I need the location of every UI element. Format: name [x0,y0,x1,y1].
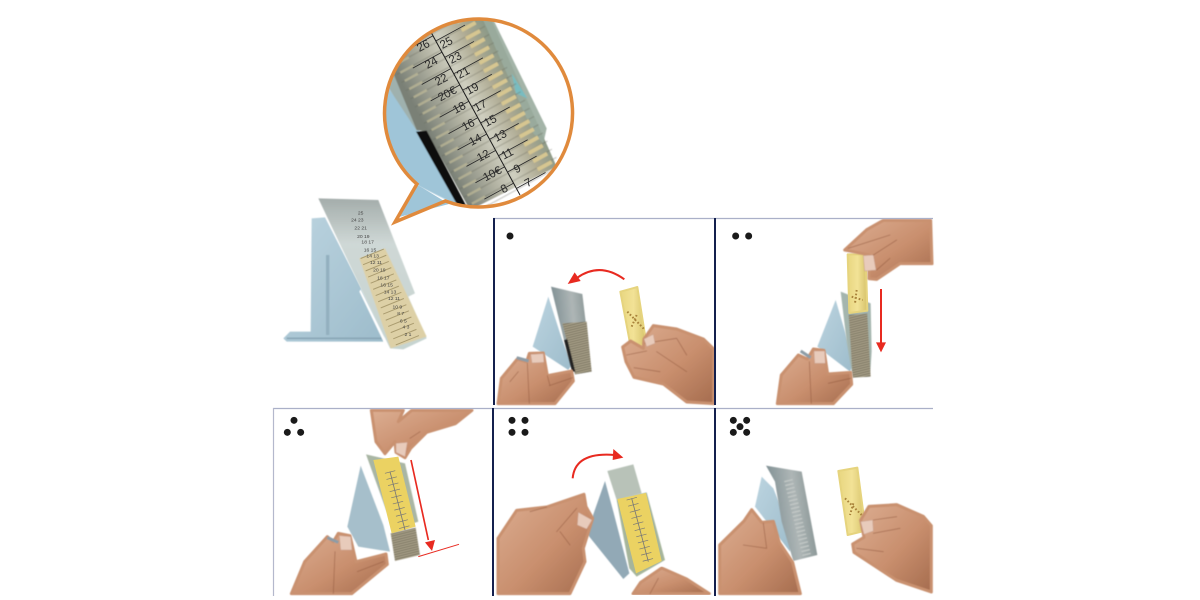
scale numbers: 14 [467,132,485,149]
top hand [371,410,472,458]
tube scale numbers: 16 15 [364,248,376,254]
magnified tube contents [386,20,557,206]
panel: step five [720,417,931,594]
tube scale numbers: 20 19 [373,268,386,274]
tube and coins [366,454,420,561]
stand [533,297,572,370]
tube scale numbers [351,210,412,338]
scale numbers: 11 [499,146,516,162]
tube scale numbers: 18 17 [377,275,390,281]
arrow curved left [568,270,624,284]
scale numbers: 23 [447,50,464,67]
tube scale numbers: 12 11 [370,260,382,266]
panel: step one [498,232,714,404]
scale numbers: 18 [451,100,468,117]
left hand [720,510,800,594]
panel: step four [498,417,709,594]
empty tube [766,466,817,561]
step marker five dots [730,417,750,436]
panel: step two [732,220,932,404]
stand [587,481,629,579]
left hand [498,494,593,594]
tube scale numbers: 6 5 [400,319,407,325]
tube scale numbers: 20 19 [357,234,370,240]
scale numbers: 12 [475,148,492,165]
callout outline [385,19,573,222]
scale numbers: 17 [472,98,489,115]
coin roll with scale [617,493,662,573]
stand [755,477,793,552]
tube scale numbers: 10 9 [392,305,402,311]
scale numbers: 10€ [481,164,504,184]
tube scale numbers: 16 15 [380,283,393,289]
left hand [498,353,573,404]
scale numbers: 13 [492,128,509,145]
left hand [777,349,852,404]
tube scale numbers: 24 23 [351,217,364,223]
device: tube on stand with coins [283,198,427,349]
scale numbers: 26 [415,38,432,55]
top hand [845,220,932,279]
arrow curved right [573,449,623,478]
scale numbers: 20€ [436,84,459,104]
arrow and baseline [411,460,459,557]
scale lines [417,26,535,203]
tube body [318,198,427,349]
stand [283,217,385,342]
tube with coins [841,292,872,378]
callout: magnified coin scale [377,8,573,222]
bottom hand [633,568,709,594]
scale numbers: 21 [455,65,472,82]
scale numbers: 7 [523,177,534,190]
panel: step three [284,410,472,594]
coin roll with scale [373,457,416,533]
scale numbers [415,35,534,196]
stand [817,300,853,372]
coin roll [848,254,867,313]
tube scale numbers: 25 [358,210,364,216]
scale numbers: 22 [433,72,450,89]
tube scale numbers: 2 1 [405,332,412,338]
coin roll [620,287,646,348]
coin roll [838,468,866,535]
tube scale numbers: 12 11 [388,296,400,302]
infographic: coin tube steps [272,17,934,596]
scale numbers: 25 [438,35,455,52]
tube scale numbers: 18 17 [361,239,374,245]
scale numbers: 19 [464,81,481,98]
tube [607,464,665,577]
step marker three dots [284,417,304,436]
panel frames [273,218,933,596]
tube scale numbers: 4 3 [403,324,410,330]
scale numbers: 8 [499,183,510,196]
tube scale numbers: 14 13 [384,289,396,295]
tube with coins [551,287,592,374]
arrow down [876,289,886,352]
right hand [853,505,931,592]
coin ridges [372,253,408,343]
tube scale numbers: 8 7 [397,311,404,317]
scale numbers: 15 [482,113,499,130]
left hand [291,533,387,594]
step marker four dots [508,417,528,436]
tube scale numbers: 14 13 [366,253,379,259]
scale numbers: 9 [512,163,523,176]
right hand [623,326,714,404]
tube scale numbers: 22 21 [354,225,367,231]
scale numbers: 16 [460,117,477,134]
stand [347,466,390,552]
step marker one dot [506,232,513,239]
scale numbers: 24 [423,55,441,72]
step marker two dots [732,232,752,239]
